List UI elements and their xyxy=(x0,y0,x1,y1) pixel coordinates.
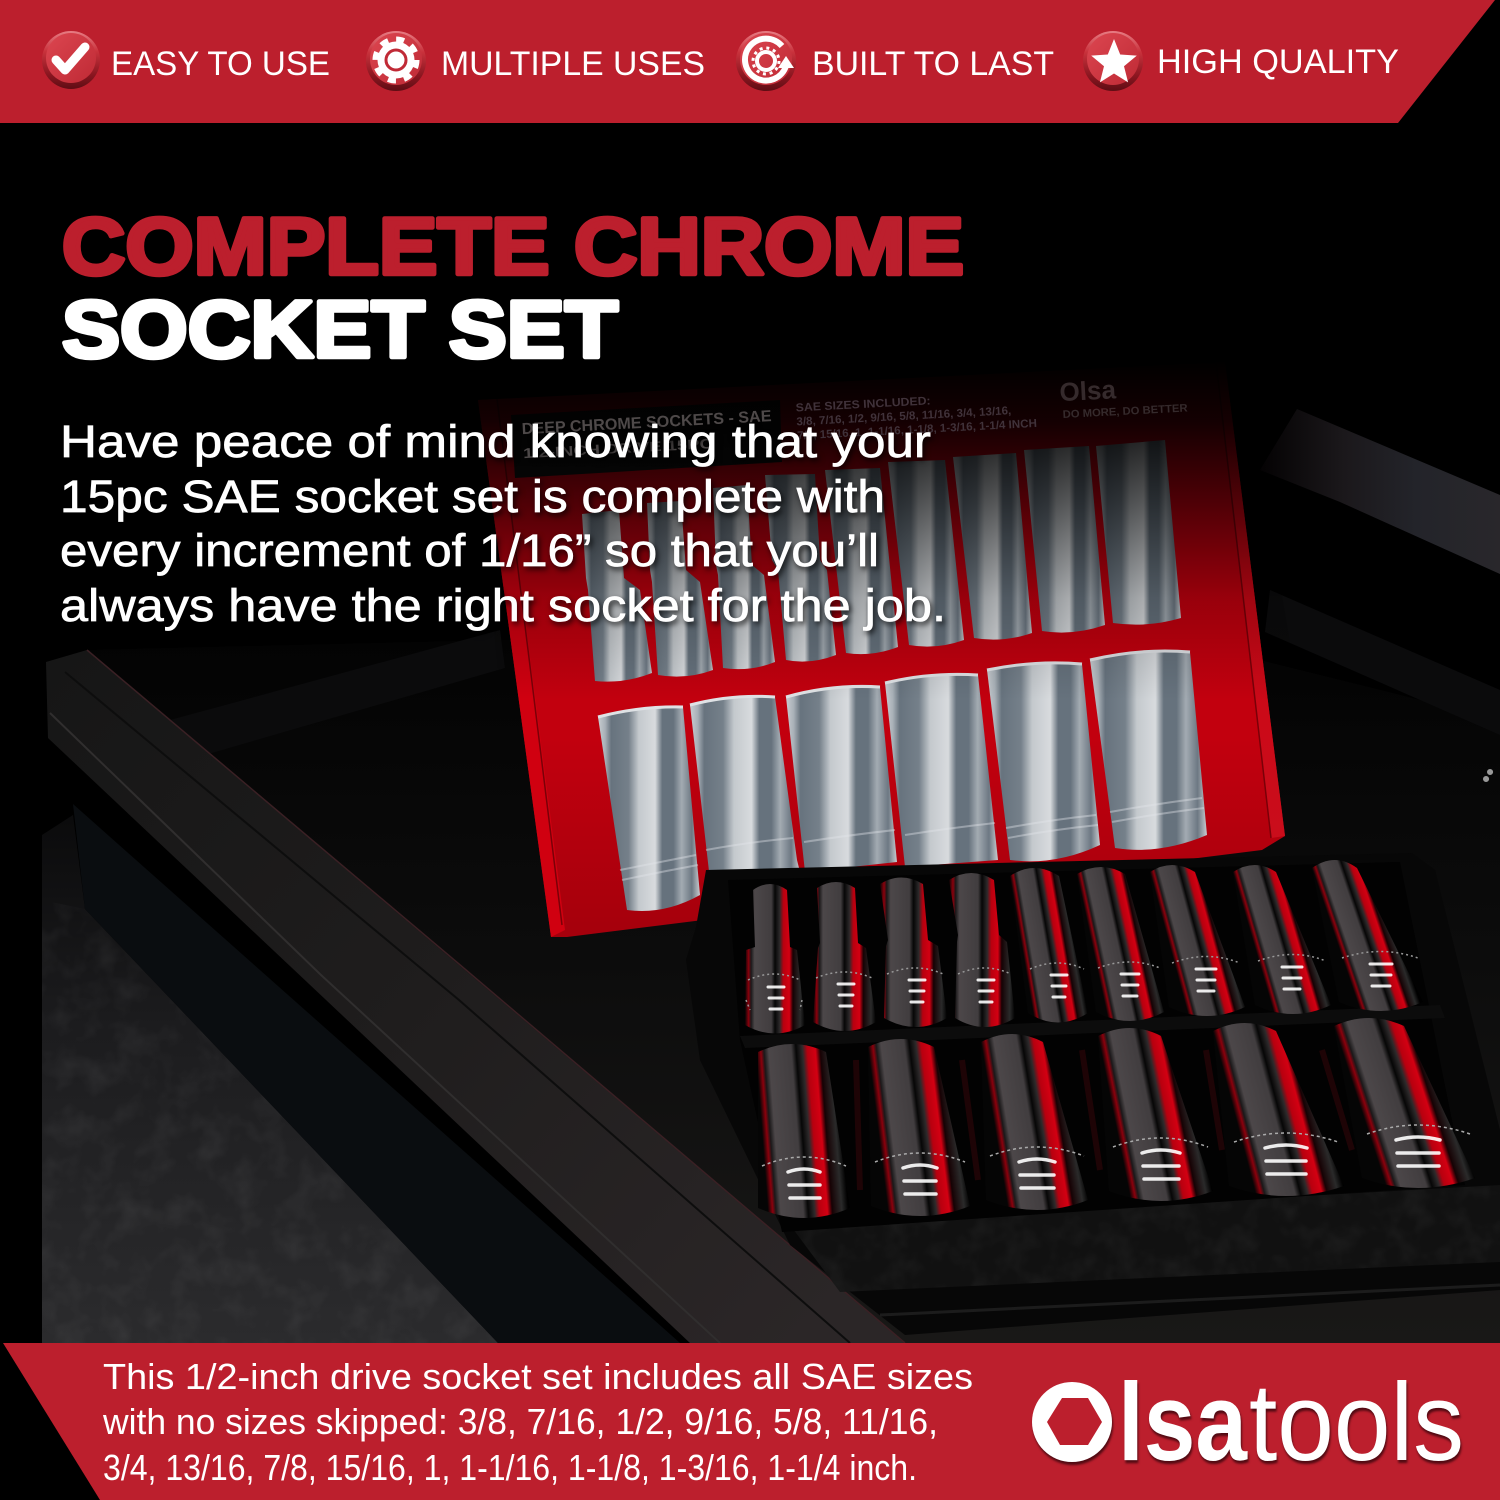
feature: multiple uses xyxy=(366,31,705,91)
size list text: 3/4, 13/16, 7/8, 15/16, 1, 1-1/16, 1-1/8, 1-3/16, 1-1/4 inch. xyxy=(103,1447,917,1488)
socket 1-3/16 xyxy=(1213,1023,1344,1196)
box label xyxy=(511,400,782,478)
icon: gear xyxy=(366,31,426,91)
box fold lines xyxy=(497,362,1271,925)
socket 1/2 xyxy=(880,878,947,1027)
socket tray xyxy=(686,853,1500,1335)
box brand xyxy=(1059,371,1188,421)
heading xyxy=(62,202,964,375)
body text: every increment of 1/16” so that you’ll xyxy=(60,525,879,576)
body text xyxy=(60,416,946,631)
logo: Olsatools: tools xyxy=(1249,1361,1464,1484)
top banner xyxy=(0,0,1495,123)
tray bottom edge xyxy=(880,1285,1500,1315)
socket 15/16 xyxy=(758,1044,850,1218)
carpet xyxy=(42,815,498,1343)
socket 1-1/16 xyxy=(981,1034,1088,1210)
small screws xyxy=(1486,772,1490,779)
box label text: 1/2-INCH DRIVE 15PC xyxy=(523,435,713,461)
socket 13/16 xyxy=(1233,865,1331,1014)
box left lip xyxy=(478,399,565,937)
icon: check mark xyxy=(42,31,100,89)
well reflections xyxy=(856,1050,1352,1190)
tray front lip xyxy=(790,1185,1500,1292)
socket 1-1/4 xyxy=(1334,1018,1475,1188)
banner shape xyxy=(0,0,1495,123)
socket 1-1/8 xyxy=(1098,1028,1213,1201)
box brand: Olsa xyxy=(1059,374,1117,407)
size list text: This 1/2-inch drive socket set includes all SAE sizes xyxy=(103,1356,973,1397)
right hinge xyxy=(1265,590,1500,735)
label: BUILT TO LAST xyxy=(812,45,1054,83)
box top shading xyxy=(470,350,1300,700)
product box xyxy=(470,350,1300,937)
logo: Olsatools: O xyxy=(1032,1361,1113,1482)
body text: always have the right socket for the job. xyxy=(60,580,946,631)
size list text xyxy=(102,1356,973,1488)
box face xyxy=(478,362,1285,937)
icon: cycle gear xyxy=(736,31,796,91)
box sizes text: 3/8, 7/16, 1/2, 9/16, 5/8, 11/16, 3/4, 13/16, xyxy=(796,405,1012,428)
box sizes text: SAE SIZES INCLUDED: xyxy=(795,395,931,414)
bottom banner xyxy=(3,1343,1500,1500)
body text: 15pc SAE socket set is complete with xyxy=(60,471,885,522)
tray body xyxy=(686,853,1500,1335)
box right lip xyxy=(1216,362,1285,838)
drawer floor xyxy=(87,640,1500,1343)
heading line 1: COMPLETE CHROME xyxy=(62,202,964,292)
feature: easy to use xyxy=(42,31,330,89)
carpet texture xyxy=(42,900,498,1343)
box sizes text xyxy=(795,390,1037,442)
left hinge xyxy=(170,630,505,755)
label: HIGH QUALITY xyxy=(1157,43,1399,81)
label: EASY TO USE xyxy=(111,45,330,83)
tray lip texture xyxy=(790,1185,1500,1292)
box label text xyxy=(521,408,773,461)
heading line 2: SOCKET SET xyxy=(62,285,618,375)
drawer side face xyxy=(73,804,680,1343)
tray wells xyxy=(728,862,1465,1232)
banner shape xyxy=(3,1343,1500,1500)
box printed sockets: front row xyxy=(598,651,1207,911)
back row sockets xyxy=(745,860,1423,1034)
socket 5/8 xyxy=(1010,868,1088,1022)
socket 3/8 xyxy=(745,884,805,1034)
box socket rims xyxy=(598,651,1190,717)
box printed sockets: back row xyxy=(582,440,1181,682)
icon: star xyxy=(1083,31,1143,91)
front row sockets xyxy=(758,1018,1475,1218)
socket 11/16 xyxy=(1077,867,1164,1021)
photo: drawer scene xyxy=(42,350,1500,1343)
drawer rail xyxy=(46,650,905,1343)
size list text: with no sizes skipped: 3/8, 7/16, 1/2, 9/16, 5/8, 11/16, xyxy=(102,1401,938,1442)
socket 1 xyxy=(868,1039,970,1216)
socket 7/8 xyxy=(1312,860,1423,1011)
right wall band xyxy=(1260,409,1500,574)
label: MULTIPLE USES xyxy=(441,45,705,83)
feature: built to last xyxy=(736,31,1054,91)
feature: high quality xyxy=(1083,31,1399,91)
box socket knurl bands xyxy=(620,798,1204,880)
box sizes text: 7/8, 15/16, 1, 1-1/16, 1-1/8, 1-3/16, 1-1/4 INCH xyxy=(797,418,1037,442)
box brand: DO MORE, DO BETTER xyxy=(1062,402,1188,421)
box label text: DEEP CHROME SOCKETS - SAE xyxy=(521,408,772,438)
socket 9/16 xyxy=(949,873,1015,1027)
socket 7/16 xyxy=(813,882,876,1031)
body text: Have peace of mind knowing that your xyxy=(60,416,931,467)
logo: Olsatools xyxy=(1032,1361,1464,1484)
tray divider xyxy=(740,1005,1445,1048)
logo: Olsatools: lsa xyxy=(1118,1361,1248,1484)
socket 3/4 xyxy=(1150,865,1245,1016)
